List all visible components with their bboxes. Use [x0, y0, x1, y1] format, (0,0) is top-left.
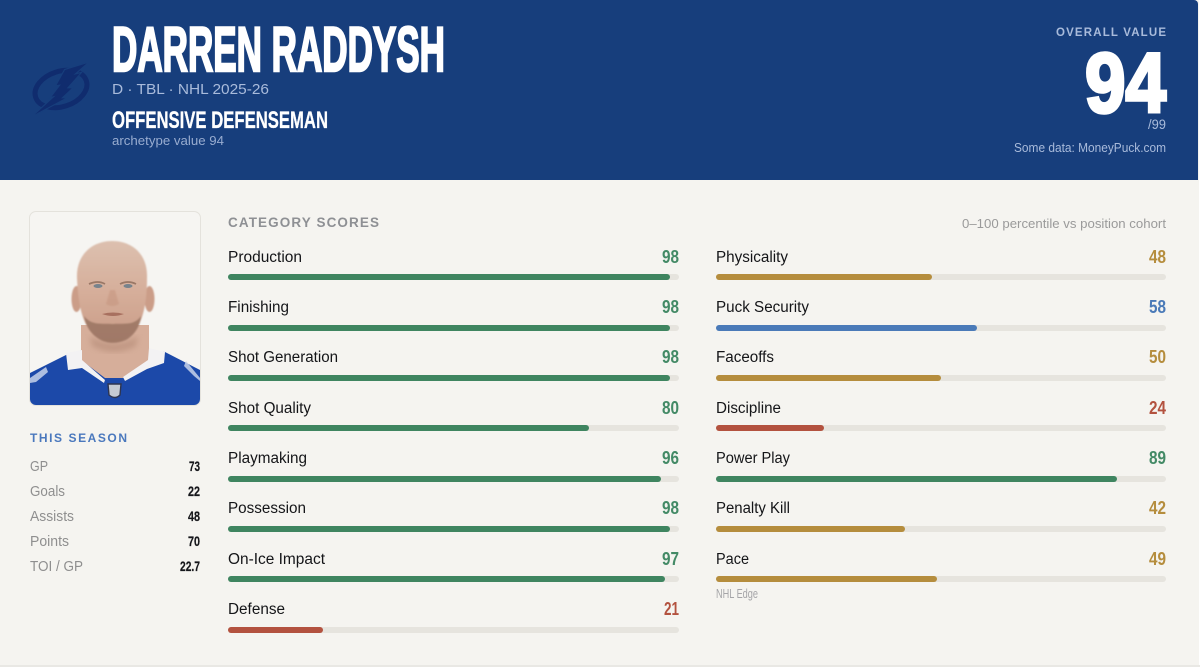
score: Puck Security: 58 — [1149, 297, 1166, 317]
stat: TOI / GP — [30, 558, 200, 575]
stat: GP: 73 — [189, 458, 200, 474]
score: Production: 98 — [662, 247, 679, 267]
score: Possession: 98 — [662, 498, 679, 518]
score: Shot Quality — [228, 398, 679, 431]
score: On-Ice Impact: 97 — [662, 549, 679, 569]
score: Finishing — [228, 297, 679, 331]
archetype name: OFFENSIVE DEFENSEMAN — [112, 107, 328, 134]
stat: Goals: Goals — [30, 484, 65, 500]
player photo — [30, 212, 200, 406]
stat: Assists: Assists — [30, 509, 74, 525]
player name: DARREN RADDYSH — [112, 15, 445, 85]
score: Defense — [228, 599, 679, 633]
score: Shot Generation: 98 — [662, 347, 679, 367]
score: Playmaking — [228, 448, 679, 482]
score: On-Ice Impact — [228, 549, 679, 582]
this season heading: THIS SEASON — [30, 431, 127, 445]
NHL Edge note: NHL Edge — [716, 587, 758, 601]
overall value label: OVERALL VALUE — [1056, 27, 1166, 39]
stat: GP — [30, 458, 200, 475]
stat: Goals — [30, 483, 200, 500]
score: Pace: Pace — [716, 551, 749, 568]
score: Power Play — [716, 448, 1166, 482]
season stats list — [30, 458, 200, 575]
score: Penalty Kill: 42 — [1149, 498, 1166, 518]
player meta line: D · TBL · NHL 2025-26 — [112, 81, 269, 98]
header band — [0, 0, 1198, 180]
score: Discipline — [716, 398, 1166, 431]
score: Physicality: 48 — [1149, 247, 1166, 267]
score: Shot Quality: Shot Quality — [228, 400, 311, 417]
score: Faceoffs: 50 — [1149, 347, 1166, 367]
score: Pace — [716, 549, 1166, 582]
out of 99: /99 — [1148, 116, 1166, 132]
score: Possession — [228, 498, 679, 532]
score: Discipline: Discipline — [716, 400, 781, 417]
scale note: 0–100 percentile vs position cohort — [962, 216, 1166, 231]
score: Shot Quality: 80 — [662, 398, 679, 418]
score: Possession: Possession — [228, 500, 306, 517]
score: Faceoffs — [716, 347, 1166, 381]
score: Puck Security — [716, 297, 1166, 331]
score: Playmaking: Playmaking — [228, 450, 307, 467]
stat: Points — [30, 533, 200, 550]
score: Penalty Kill — [716, 498, 1166, 532]
score: Faceoffs: Faceoffs — [716, 349, 774, 366]
icon: team lightning bolt logo — [30, 63, 92, 114]
data source: Some data: MoneyPuck.com — [1014, 141, 1166, 155]
right score column — [716, 247, 1166, 601]
stat: TOI / GP: TOI / GP — [30, 559, 83, 575]
score: Finishing: 98 — [662, 297, 679, 317]
score: On-Ice Impact: On-Ice Impact — [228, 551, 326, 568]
score: Playmaking: 96 — [662, 448, 679, 468]
stat: Points: 70 — [188, 533, 200, 549]
stat: Points: Points — [30, 534, 69, 550]
stat: GP: GP — [30, 459, 48, 475]
score: Shot Generation — [228, 347, 679, 381]
score: Pace: 49 — [1149, 549, 1166, 569]
left score column — [228, 247, 679, 633]
score: Physicality: Physicality — [716, 249, 788, 266]
score: Power Play: Power Play — [716, 450, 790, 467]
score: Defense: 21 — [664, 599, 679, 619]
stat: Assists: 48 — [188, 508, 200, 524]
stat: Goals: 22 — [188, 483, 200, 499]
score: Production: Production — [228, 249, 302, 266]
category scores heading: CATEGORY SCORES — [228, 215, 379, 230]
archetype value: archetype value 94 — [112, 133, 224, 148]
score: Physicality — [716, 247, 1166, 280]
score: Power Play: 89 — [1149, 448, 1166, 468]
score: Puck Security: Puck Security — [716, 299, 809, 316]
stat: TOI / GP: 22.7 — [180, 558, 200, 574]
overall value score: 94 — [1085, 36, 1166, 130]
score: Discipline: 24 — [1149, 398, 1166, 418]
stat: Assists — [30, 508, 200, 525]
score: Shot Generation: Shot Generation — [228, 349, 338, 366]
score: Penalty Kill: Penalty Kill — [716, 500, 790, 517]
score: Production — [228, 247, 679, 280]
score: Finishing: Finishing — [228, 299, 289, 316]
score: Defense: Defense — [228, 601, 285, 618]
